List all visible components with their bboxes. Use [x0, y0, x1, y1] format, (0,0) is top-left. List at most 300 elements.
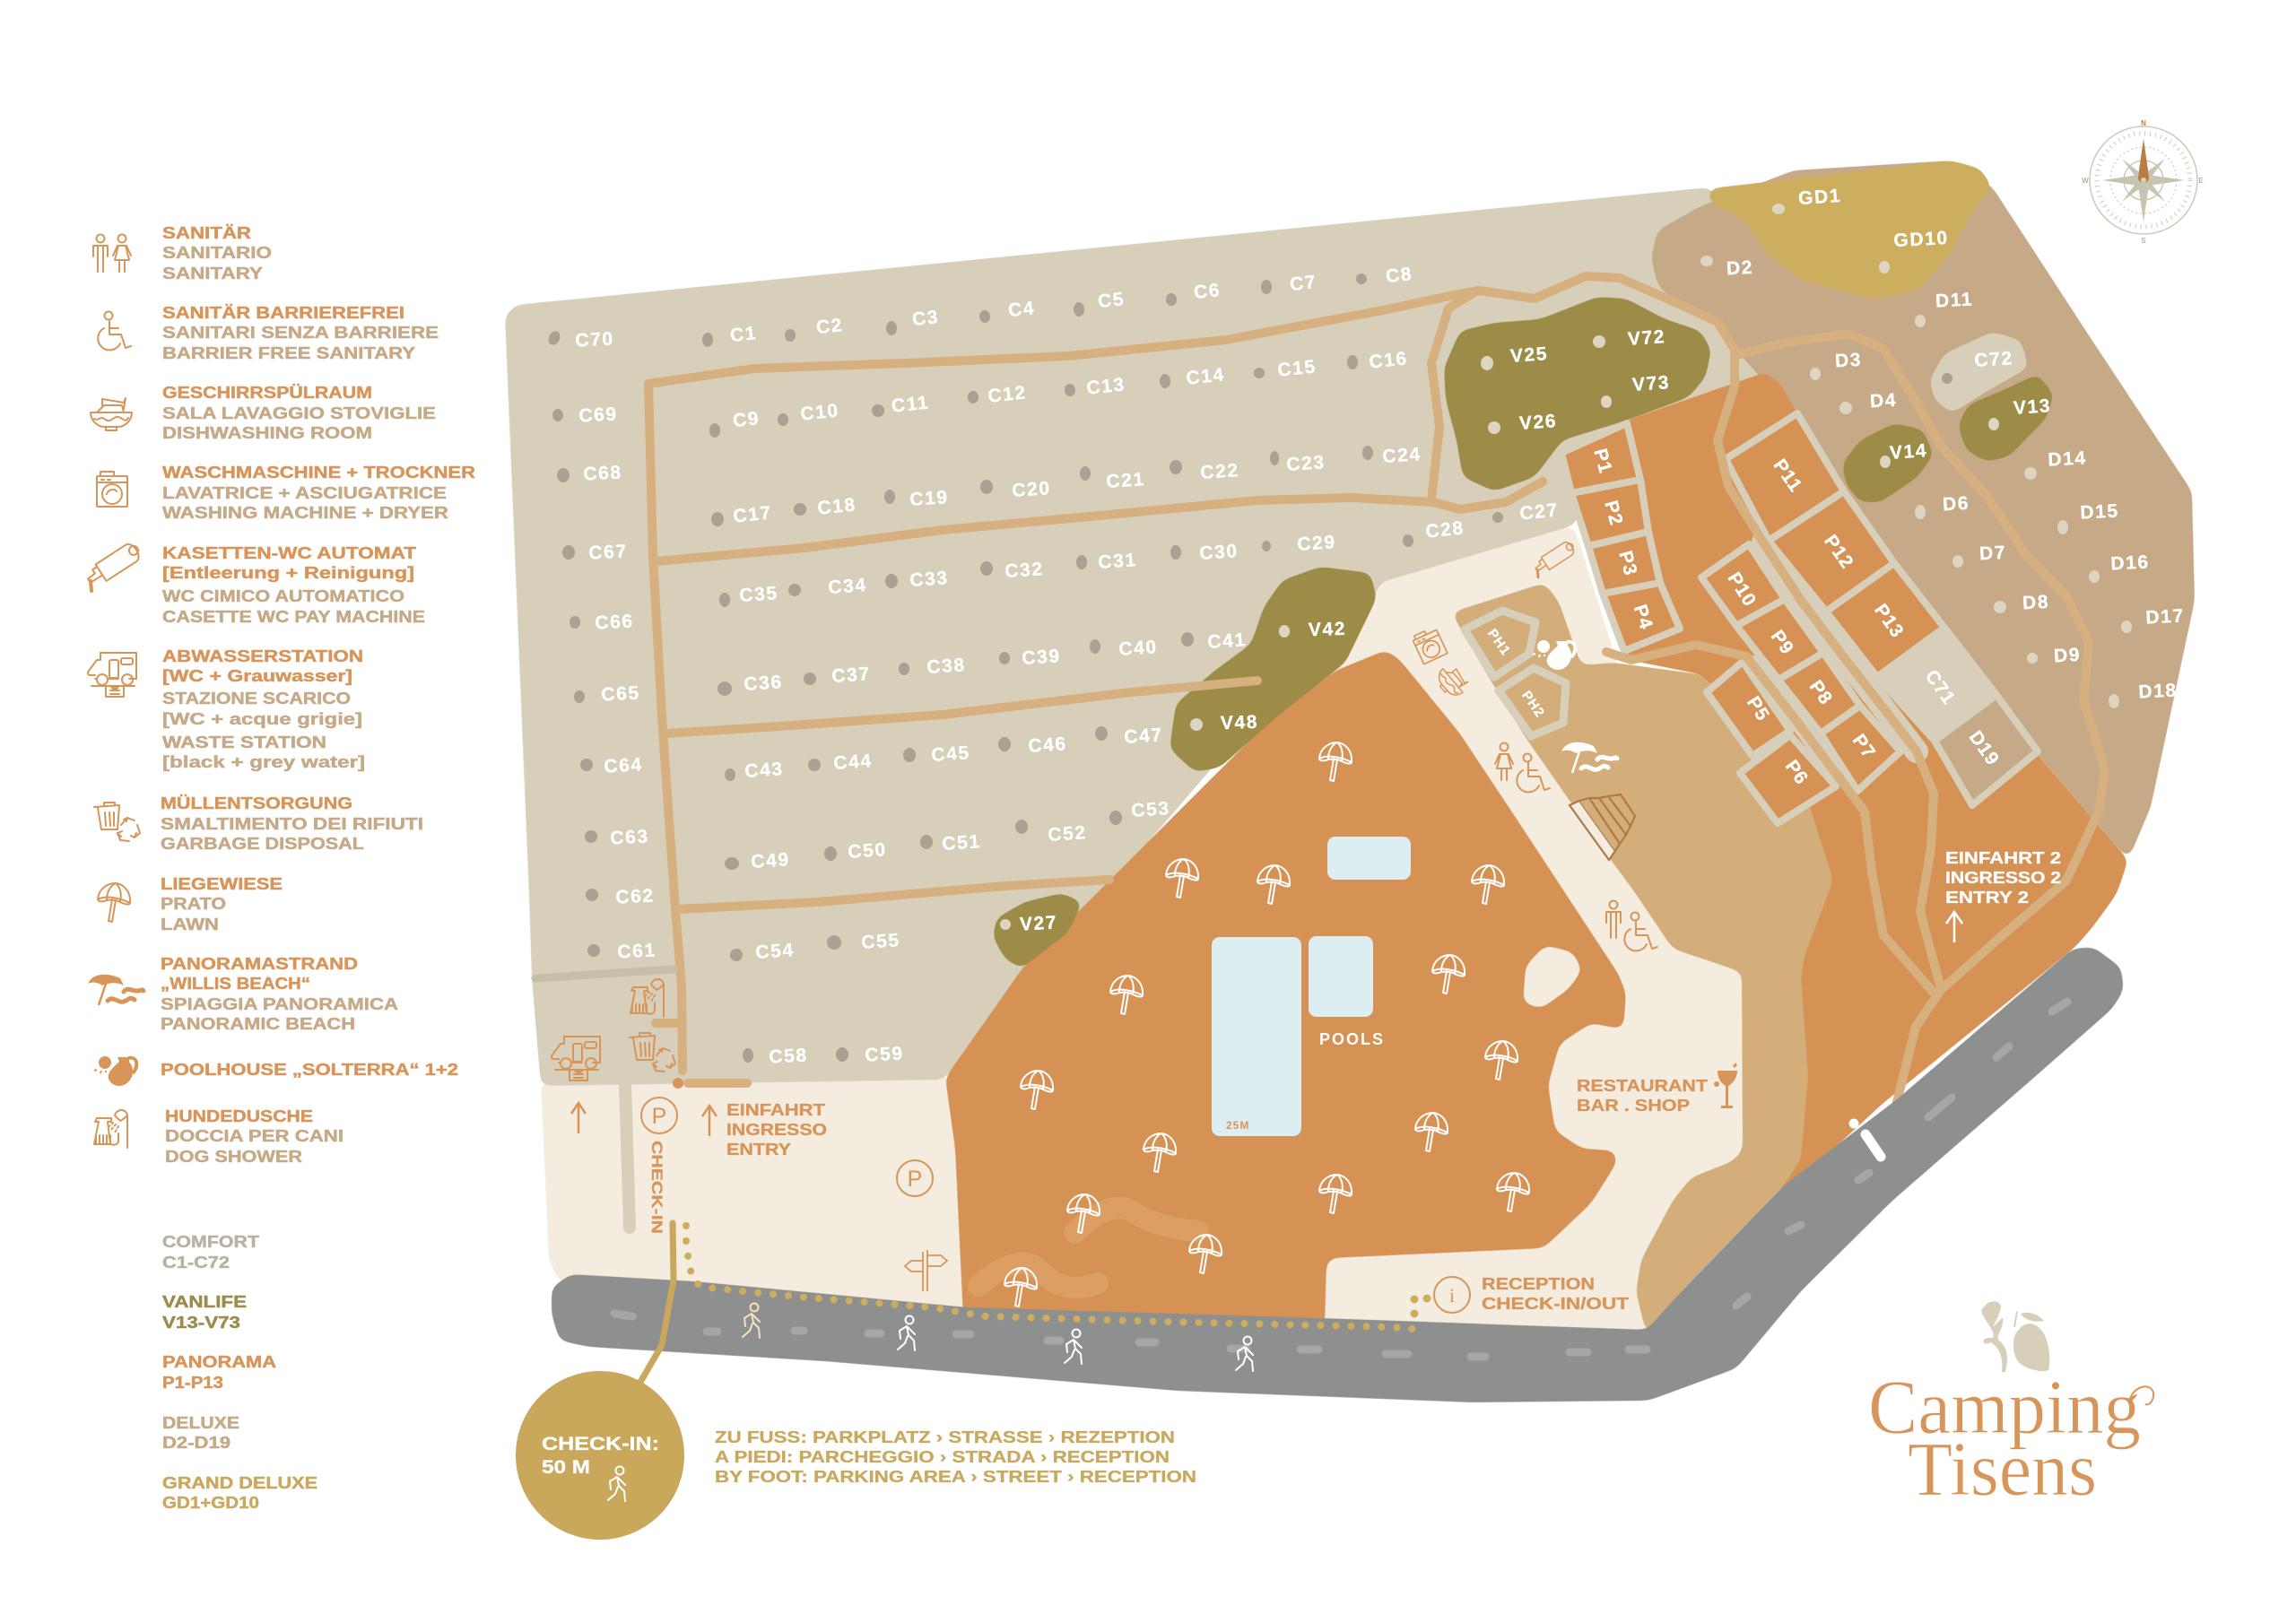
icon: parking entry: P: [652, 1104, 666, 1129]
pitch D2: [1700, 256, 1754, 279]
legend: garbage: SMALTIMENTO DEI RIFIUTI: [161, 815, 423, 833]
pitch D16: D16: [2110, 551, 2150, 575]
pitch D6: D6: [1942, 493, 1970, 515]
pitch C19: [884, 487, 949, 510]
pitch C40: C40: [1118, 637, 1158, 660]
category: comfort: COMFORT: [162, 1233, 259, 1251]
icon: stairs: [1570, 794, 1635, 860]
pitch C7: [1261, 272, 1318, 295]
legend: cassette WC: [Entleerung + Reinigung]: [162, 564, 414, 582]
pitch C39: [999, 646, 1061, 669]
pitch C3: C3: [911, 307, 940, 330]
pitch C29: [1262, 532, 1336, 555]
pitch C10: C10: [799, 400, 840, 425]
map icons: [552, 540, 1657, 1081]
pitch C41: [1181, 629, 1247, 653]
category: grand deluxe: GRAND DELUXE: [162, 1474, 317, 1492]
legend: dog shower: HUNDEDUSCHE: [165, 1107, 313, 1125]
pitch V27: V27: [1019, 912, 1058, 935]
compass: N: [2141, 119, 2146, 127]
plot P13: P13: [1870, 600, 1908, 642]
legend: cassette WC: [83, 541, 425, 626]
pitch C38: C38: [926, 655, 966, 678]
legend: washing machine: [97, 464, 475, 522]
category: deluxe: D2-D19: [162, 1434, 230, 1452]
pitch C40: [1090, 637, 1158, 660]
pitch C69: C69: [578, 404, 618, 427]
internal paths: [648, 276, 2105, 1102]
label: entry 2: EINFAHRT 2: [1945, 849, 2061, 867]
plot P8: P8: [1805, 677, 1836, 709]
pitch V25: V25: [1509, 343, 1549, 367]
legend: panoramic beach: PANORAMASTRAND: [161, 955, 358, 973]
pitch C12: [968, 382, 1028, 407]
pitch C33: C33: [909, 568, 949, 591]
pitch C4: C4: [1007, 298, 1036, 321]
pitch C11: C11: [891, 392, 930, 417]
pitch C10: [778, 400, 840, 426]
pitch C21: C21: [1106, 469, 1145, 492]
pitch C49: [725, 849, 790, 872]
legend: waste station: [88, 647, 365, 771]
pitch D15: D15: [2080, 500, 2119, 524]
pitch C14: [1160, 364, 1226, 389]
comfort pitches: [546, 264, 2013, 1068]
category: vanlife: V13-V73: [162, 1314, 240, 1332]
icon: information: [1434, 1277, 1470, 1313]
check-in gold line: [639, 1223, 674, 1384]
pitch C15: C15: [1276, 356, 1318, 381]
pitch C30: [1170, 541, 1239, 564]
zone: pool lawn: [945, 650, 1626, 1327]
pitch C27: [1492, 499, 1560, 525]
pitch C32: [980, 559, 1044, 582]
category: vanlife: [162, 1293, 247, 1332]
logo wordmark: Tisens: Tisens: [1908, 1426, 2097, 1512]
label: entry: EINFAHRT: [726, 1101, 825, 1119]
legend: barrier free: [98, 304, 439, 362]
pitch GD1: [1772, 186, 1842, 214]
arrow: entry: [702, 1106, 717, 1136]
plot P1: P1: [1589, 447, 1616, 476]
legend: waste station: [black + grey water]: [162, 753, 365, 771]
plot P4: [1603, 583, 1680, 651]
plot P3: P3: [1614, 549, 1641, 578]
pitch C51: [920, 831, 981, 855]
pitch C37: C37: [831, 664, 871, 687]
legend: panoramic beach: [88, 955, 398, 1033]
pitch C5: [1074, 289, 1126, 317]
pitch C47: C47: [1124, 725, 1163, 748]
plot P6: [1740, 735, 1836, 823]
pitch C44: [808, 751, 873, 774]
pitch C21: [1080, 466, 1145, 492]
plot P7: [1821, 706, 1900, 791]
zone: panorama pitches: [1570, 372, 2128, 1195]
zone: comfort pitches: [505, 187, 1766, 1086]
pitch V13: [1988, 395, 2052, 430]
pitch D11: D11: [1935, 289, 1974, 312]
legend: sanitary: SANITARY: [162, 265, 263, 282]
pitch C35: [719, 583, 778, 607]
pitch D9: [2027, 645, 2082, 666]
blob: V42 V48: [1170, 567, 1377, 772]
legend: cassette WC: CASETTE WC PAY MACHINE: [162, 608, 425, 626]
access point dot: [673, 1078, 683, 1089]
pitch D14: [2024, 447, 2087, 480]
logo emblem: branch and lemon: [1981, 1301, 2049, 1372]
legend: dishwashing: GESCHIRRSPÜLRAUM: [162, 384, 372, 402]
pitch C5: C5: [1097, 289, 1126, 312]
pitch C34: C34: [828, 575, 867, 598]
pitch C4: [979, 298, 1036, 323]
pitch V72: V72: [1627, 326, 1666, 350]
legend: lawn: PRATO: [161, 895, 226, 913]
legend: sanitary: [93, 224, 272, 282]
campsite map: [505, 161, 2195, 1402]
walker on road one: [743, 1304, 760, 1338]
pitch C67: C67: [588, 541, 628, 564]
blob: C72: [1929, 332, 2029, 413]
walking route text: ZU FUSS: PARKPLATZ › STRASSE › REZEPTION: [715, 1428, 1175, 1446]
pitch C9: C9: [732, 408, 761, 431]
arrow: entry 2: [1946, 912, 1962, 942]
legend: waste station: STAZIONE SCARICO: [162, 690, 351, 707]
pitch V27: [1000, 912, 1058, 935]
icon: woman: [1495, 742, 1513, 780]
pitch D17: [2121, 605, 2185, 633]
poolhouse PH1: [1465, 611, 1535, 677]
icon: wheelchair two: [1624, 913, 1657, 950]
pitch V14: [1880, 440, 1928, 468]
pitch C9: [709, 408, 761, 438]
label: check-in vertical: CHECK-IN: [648, 1141, 665, 1234]
pool small: [1327, 837, 1411, 880]
legend: sanitary: SANITARIO: [162, 244, 272, 262]
pitch C49: C49: [751, 849, 790, 872]
plot P1: [1561, 423, 1640, 493]
legend: dishwashing: [91, 384, 436, 442]
plot P9: P9: [1767, 627, 1797, 659]
reception dots: [1410, 1295, 1431, 1318]
pitch C32: C32: [1004, 559, 1044, 582]
plot P11: [1726, 413, 1844, 541]
legend: dishwashing: DISHWASHING ROOM: [162, 424, 372, 442]
pitch C18: C18: [816, 494, 857, 519]
walking route text: [715, 1428, 1196, 1486]
pitch C1: C1: [729, 323, 758, 346]
pitch D6: [1915, 493, 1970, 519]
category: panorama: [162, 1353, 276, 1392]
check-in circle: [516, 1371, 684, 1540]
pitch C61: [587, 940, 657, 963]
walker on road three: [1065, 1329, 1082, 1364]
plot P5: P5: [1743, 693, 1773, 725]
plot D19: D19: [1965, 727, 2003, 769]
zone: deluxe pitches: [1651, 161, 2195, 860]
label: entry: INGRESSO: [726, 1121, 827, 1139]
plot P8: [1779, 653, 1860, 733]
label: restaurant: BAR . SHOP: [1577, 1097, 1690, 1115]
icon: trash: [630, 1033, 675, 1072]
pitch C72: C72: [1974, 348, 2013, 371]
legend: poolhouse: POOLHOUSE „SOLTERRA“ 1+2: [161, 1061, 458, 1079]
pitch D4: D4: [1869, 390, 1898, 412]
pitch C43: C43: [744, 759, 784, 782]
legend: dog shower: DOG SHOWER: [165, 1148, 302, 1166]
legend: cassette WC: KASETTEN-WC AUTOMAT: [162, 544, 416, 562]
pitch GD10: [1879, 228, 1949, 273]
category: grand deluxe: [162, 1474, 317, 1512]
compass: E: [2198, 177, 2204, 185]
legend: garbage: [94, 794, 423, 853]
pitch C51: C51: [942, 831, 981, 855]
pitch C47: [1095, 725, 1163, 748]
label: entry: [726, 1101, 827, 1159]
pitch V73: [1601, 372, 1671, 408]
pitch C27: C27: [1518, 499, 1560, 525]
legend: [83, 224, 475, 1512]
walker on road four: [1236, 1336, 1253, 1371]
pitch C28: C28: [1424, 517, 1465, 542]
legend: washing machine: LAVATRICE + ASCIUGATRICE: [162, 484, 447, 502]
pitch C2: [785, 315, 844, 342]
legend: waste station: ABWASSERSTATION: [162, 647, 363, 665]
pitch C55: [827, 930, 900, 953]
pitch D15: [2057, 500, 2119, 534]
category: comfort: C1-C72: [162, 1254, 230, 1271]
pitch C1: [702, 323, 758, 347]
legend: washing machine: WASHING MACHINE + DRYER: [162, 504, 448, 522]
pitch C24: C24: [1382, 444, 1422, 467]
pitch C6: C6: [1193, 280, 1222, 303]
pitch C34: [788, 575, 867, 598]
legend: waste station: [WC + Grauwasser]: [162, 667, 352, 685]
pitch C24: [1362, 444, 1422, 467]
icon: cocktail: [1714, 1063, 1737, 1108]
pitch C55: C55: [861, 930, 900, 953]
label: entry 2: [1945, 849, 2061, 907]
legend: dishwashing: SALA LAVAGGIO STOVIGLIE: [162, 404, 436, 422]
pitch D8: [1994, 592, 2050, 613]
pitch C64: [580, 754, 643, 777]
pitch V42: V42: [1309, 619, 1347, 640]
plot P5: [1707, 662, 1790, 756]
plot P10: [1701, 544, 1785, 626]
legend: waste station: [WC + acque grigie]: [162, 710, 362, 728]
pitch C44: C44: [833, 751, 873, 774]
legend: garbage: MÜLLENTSORGUNG: [161, 794, 352, 812]
label: reception: [1482, 1275, 1629, 1313]
plot P13: [1826, 563, 1944, 677]
pitch C13: [1065, 374, 1126, 399]
icon: wheelchair: [1517, 753, 1550, 792]
compass: S: [2141, 237, 2146, 245]
icon: washing machine: [1412, 626, 1448, 664]
pitch C16: [1347, 348, 1409, 373]
pitch C12: C12: [987, 382, 1028, 407]
beige lanes between panorama rows: [1754, 542, 1917, 771]
icon: parking second: P: [908, 1167, 922, 1192]
plot P7: P7: [1848, 731, 1879, 763]
zone: cream walkway and reception: [1256, 525, 1743, 1336]
pitch V13: V13: [2013, 395, 2052, 419]
category: grand deluxe: GD1+GD10: [162, 1494, 259, 1512]
pitch V25: [1481, 343, 1549, 370]
pond on the lawn: [1523, 945, 1582, 1009]
area C71: [1877, 628, 1996, 741]
poolhouse PH1: PH1: [1484, 626, 1513, 659]
pitch C66: C66: [595, 611, 634, 634]
pitch C13: C13: [1085, 374, 1126, 399]
plot P4: P4: [1630, 603, 1657, 632]
road: [552, 947, 2124, 1402]
legend: barrier free: SANITARI SENZA BARRIERE: [162, 324, 439, 342]
compass: [2082, 119, 2204, 245]
pitch C22: C22: [1200, 460, 1239, 483]
pitch C35: C35: [739, 583, 778, 606]
pitch C19: C19: [909, 487, 949, 510]
pitch D17: D17: [2145, 605, 2185, 629]
icon: dog shower: [631, 979, 664, 1017]
pitch C28: [1403, 517, 1465, 547]
icon: man: [1606, 900, 1621, 938]
pitch C17: C17: [732, 502, 773, 527]
lawn umbrellas: [1004, 742, 1529, 1306]
pitch C16: C16: [1368, 348, 1409, 373]
pitch C2: C2: [815, 315, 844, 338]
category: panorama: P1-P13: [162, 1374, 223, 1392]
blob: V27: [993, 893, 1083, 968]
pitch V73: V73: [1631, 372, 1671, 395]
label: entry: ENTRY: [726, 1141, 791, 1159]
side lane: [535, 969, 674, 978]
pitch C53: [1109, 798, 1170, 825]
zone: tan panorama beach: [1451, 583, 1833, 1336]
legend: sanitary: SANITÄR: [162, 224, 251, 242]
legend: cassette WC: WC CIMICO AUTOMATICO: [162, 587, 404, 605]
label: reception: RECEPTION: [1482, 1275, 1595, 1293]
legend: lawn: LIEGEWIESE: [161, 875, 283, 893]
plot P2: [1571, 480, 1648, 546]
area C71: C71: [1921, 666, 1959, 708]
road centre dashes: [614, 1002, 2067, 1357]
parking driveway: [625, 1084, 630, 1228]
poolhouse PH2: PH2: [1518, 688, 1547, 721]
pitch C38: [899, 655, 966, 678]
pitch C20: C20: [1012, 478, 1051, 501]
pitch C58: [743, 1045, 808, 1068]
icon: waste station: [552, 1037, 600, 1081]
category: vanlife: VANLIFE: [162, 1293, 247, 1311]
icon: white jug: [1533, 640, 1575, 670]
pitch D3: D3: [1834, 350, 1863, 371]
pitch C52: [1015, 820, 1087, 846]
pitch V14: V14: [1889, 440, 1928, 464]
logo wordmark: Camping: Camping: [1868, 1364, 2141, 1450]
pitch C52: C52: [1048, 822, 1087, 846]
pitch C59: C59: [865, 1043, 904, 1066]
pitch C61: C61: [617, 940, 657, 963]
legend: barrier free: SANITÄR BARRIEREFREI: [162, 304, 404, 322]
blob: V25 V26 V72 V73: [1444, 297, 1711, 491]
pitch C45: C45: [931, 742, 970, 766]
pitch D2: D2: [1726, 257, 1754, 279]
pitch C41: C41: [1207, 629, 1247, 653]
category: panorama: PANORAMA: [162, 1353, 276, 1371]
panorama plots: [1465, 413, 2038, 823]
pitch C43: [725, 759, 784, 782]
icon: parking second: [897, 1160, 933, 1196]
pitch C50: C50: [848, 839, 887, 863]
pitch C22: [1170, 460, 1239, 483]
poolhouse PH2: [1499, 668, 1566, 736]
pitch D16: [2089, 551, 2150, 583]
legend: dog shower: DOCCIA PER CANI: [165, 1127, 344, 1145]
arrow: parking: [571, 1103, 586, 1133]
pitch V26: [1488, 411, 1558, 434]
pitch D7: D7: [1979, 542, 2007, 564]
pitch D14: D14: [2048, 447, 2087, 471]
legend: panoramic beach: SPIAGGIA PANORAMICA: [161, 995, 398, 1013]
pitch V26: V26: [1518, 411, 1558, 434]
pitch C6: [1166, 280, 1222, 306]
walking route text: A PIEDI: PARCHEGGIO › STRADA › RECEPTION: [715, 1448, 1170, 1466]
pitch C37: [804, 664, 871, 687]
pitch GD10: GD10: [1893, 228, 1949, 251]
plot P10: P10: [1724, 568, 1761, 611]
pitch D9: D9: [2053, 645, 2082, 666]
label: entry 2: INGRESSO 2: [1945, 869, 2061, 887]
icon: dishwashing: [1432, 662, 1471, 701]
pitch C58: C58: [769, 1045, 808, 1068]
pools label: POOLS: [1319, 1030, 1385, 1048]
zone: cream parking area: [541, 1076, 973, 1314]
legend: lawn: LAWN: [161, 916, 219, 933]
pitch C46: [998, 733, 1067, 757]
label: reception: CHECK-IN/OUT: [1482, 1295, 1629, 1313]
pitch C54: [730, 940, 795, 963]
logo: [1868, 1301, 2153, 1512]
pitch C8: [1356, 264, 1413, 287]
plot P12: [1769, 491, 1894, 612]
label: restaurant: RESTAURANT: [1577, 1077, 1708, 1095]
lighter beach strip two: [978, 1263, 1098, 1288]
zone: grand deluxe: [1706, 161, 1992, 299]
pitch C69: [552, 404, 618, 427]
pitch C36: [718, 672, 783, 696]
pitch C33: [885, 568, 949, 591]
pitch C53: C53: [1131, 798, 1170, 821]
pitch V42: [1279, 619, 1347, 640]
plot P6: P6: [1781, 757, 1812, 789]
icon: signpost: [905, 1250, 947, 1291]
pitch C29: C29: [1297, 532, 1336, 555]
icon: information: i: [1449, 1284, 1455, 1306]
legend: barrier free: BARRIER FREE SANITARY: [162, 344, 415, 362]
category: deluxe: [162, 1414, 239, 1452]
pitch D7: [1952, 542, 2007, 568]
walking route text: BY FOOT: PARKING AREA › STREET › RECEPTION: [715, 1468, 1196, 1486]
pitch C66: [570, 611, 634, 634]
category: deluxe: DELUXE: [162, 1414, 239, 1432]
pitch C63: [585, 826, 649, 849]
legend: dog shower: [94, 1107, 344, 1166]
pitch C3: [886, 307, 940, 335]
pitch V72: [1593, 326, 1666, 350]
pitch C17: [711, 502, 773, 527]
pitch C31: C31: [1098, 550, 1137, 573]
